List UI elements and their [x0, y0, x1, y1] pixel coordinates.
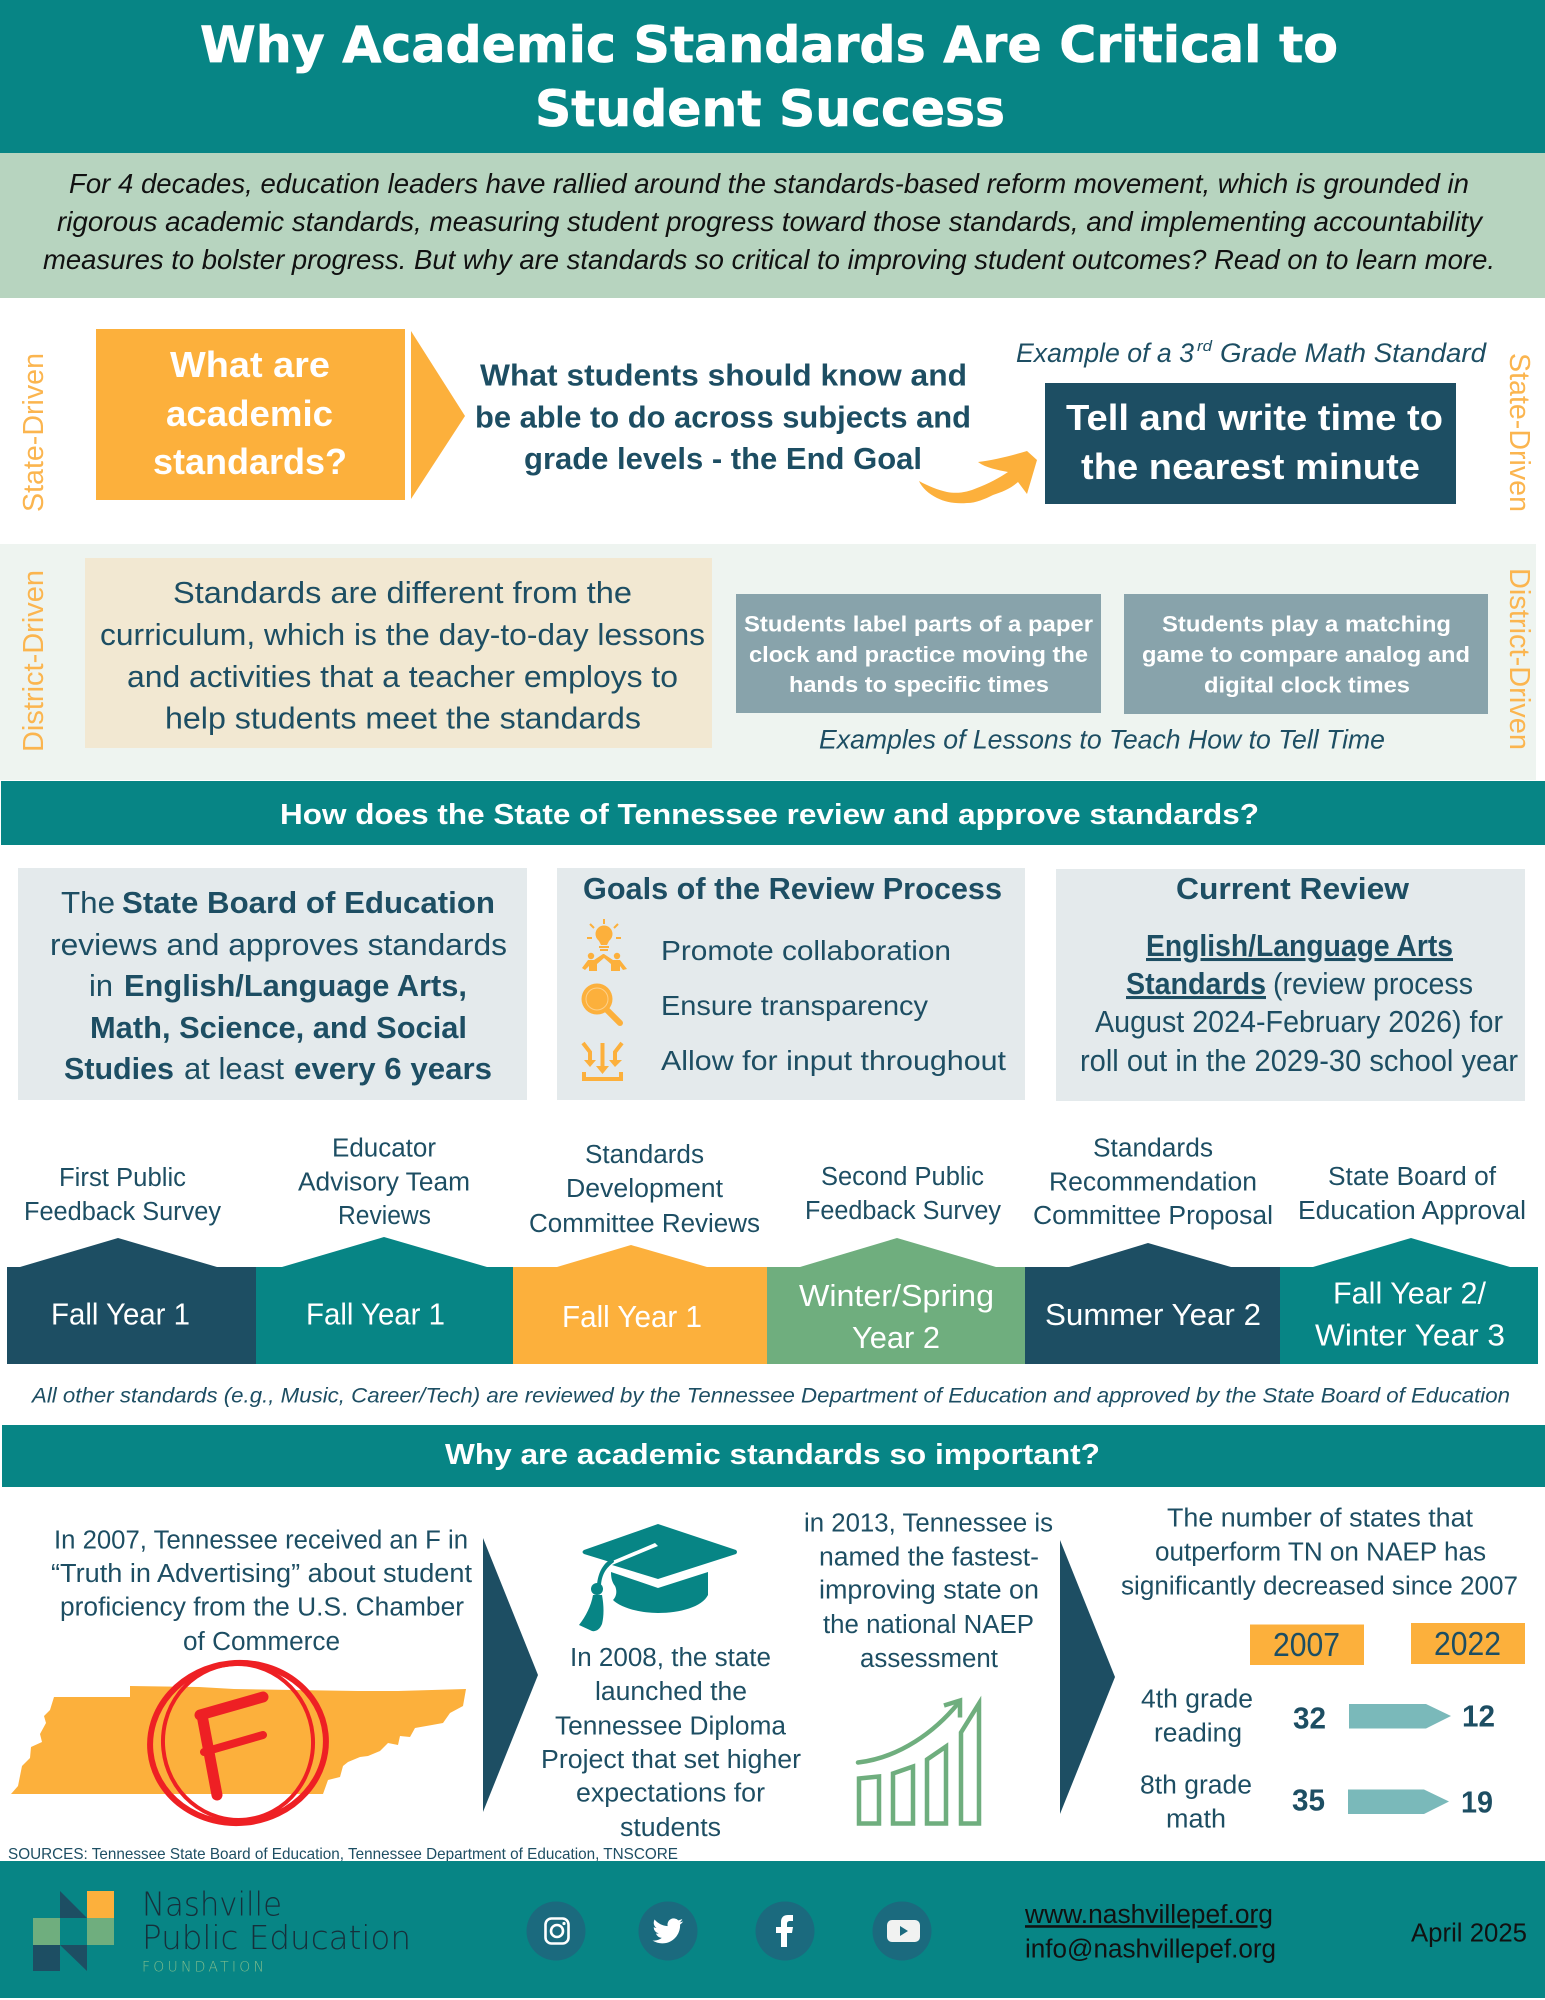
callout: curriculum difference: curriculum, which is the day-to-day lessons — [100, 617, 705, 652]
text block: definition of standards: grade levels - the End Goal — [524, 441, 922, 476]
step 6 label — [1298, 1163, 1526, 1225]
callout: example standard — [1045, 383, 1456, 504]
contact info: info@nashvillepef.org — [1025, 1935, 1276, 1963]
heading: example of a math standard: rd — [1197, 338, 1213, 355]
text block: 2007 F grade: In 2007, Tennessee received an F in — [54, 1526, 468, 1554]
caption: lesson examples: Examples of Lessons to Teach How to Tell Time — [819, 724, 1385, 754]
panel: state board: at least — [184, 1051, 284, 1086]
callout: example standard: the nearest minute — [1081, 446, 1420, 487]
step 2 block: Fall Year 1 — [306, 1296, 445, 1332]
lesson example 2 — [1124, 594, 1488, 714]
timeline — [7, 1134, 1538, 1364]
text block: 2013 NAEP: named the fastest- — [819, 1543, 1039, 1571]
logo wordmark: Nashville — [142, 1885, 282, 1924]
text block: 2008 diploma project: expectations for — [576, 1780, 766, 1808]
icon: graduation cap — [579, 1524, 737, 1631]
step 4 label — [805, 1163, 1001, 1225]
arrow: orange chevron — [411, 331, 465, 499]
callout: curriculum difference: and activities that a teacher employs to — [127, 659, 678, 694]
icon: collaboration bulb — [582, 919, 627, 971]
step 3 label: Committee Reviews — [529, 1210, 760, 1238]
step 2 label: Educator — [332, 1134, 437, 1162]
step 5 label — [1033, 1134, 1273, 1230]
step 6 block: Winter Year 3 — [1315, 1318, 1505, 1352]
text block: 2008 diploma project: Project that set higher — [541, 1746, 802, 1774]
text block: 2013 NAEP: in 2013, Tennessee is — [804, 1509, 1053, 1537]
callout: curriculum difference: help students meet the standards — [165, 700, 641, 736]
section heading: Tennessee review: How does the State of Tennessee review and approve standards? — [280, 799, 1259, 831]
text block: 2008 diploma project: Tennessee Diploma — [555, 1712, 787, 1740]
contact info — [1024, 1901, 1276, 1963]
lesson example 1: Students label parts of a paper — [744, 612, 1093, 636]
icon: instagram — [526, 1902, 586, 1960]
callout: what are academic standards — [96, 329, 405, 500]
intro band: rigorous academic standards, measuring student progress toward those standards, and implementing accountability — [57, 206, 1484, 237]
title banner — [0, 0, 1545, 153]
step 2 label: Reviews — [338, 1202, 431, 1230]
step 2 block — [256, 1237, 513, 1364]
arrow: navy 1 — [483, 1538, 538, 1812]
logo wordmark: Public Education — [142, 1918, 411, 1957]
heading: example of a math standard: Example of a 3 — [1016, 338, 1194, 368]
intro band: For 4 decades, education leaders have rallied around the standards-based reform movement, which is grounded in — [69, 168, 1469, 199]
text block: 2008 diploma project: In 2008, the state — [570, 1644, 771, 1672]
logo mark — [33, 1891, 114, 1971]
step 4 block: Winter/Spring — [799, 1278, 994, 1313]
section heading: importance: Why are academic standards so important? — [445, 1439, 1100, 1471]
row: 8th grade math: 35 — [1292, 1783, 1325, 1818]
heading: goals: Goals of the Review Process — [583, 871, 1002, 906]
icon: input arrows — [583, 1043, 622, 1079]
step 6 label: Education Approval — [1298, 1197, 1526, 1225]
lesson example 2: Students play a matching — [1162, 612, 1451, 636]
intro band: measures to bolster progress. But why are standards so critical to improving student outcomes? Read on to learn more. — [43, 244, 1495, 275]
callout: what are academic standards: standards? — [153, 441, 347, 482]
intro band — [0, 153, 1545, 298]
panel: current review: Current Review — [1176, 872, 1409, 906]
logo wordmark: FOUNDATION — [142, 1960, 264, 1976]
panel: state board: reviews and approves standards — [50, 927, 507, 962]
note: other standards: All other standards (e.g., Music, Career/Tech) are reviewed by the Tennessee Department of Education and approved by the State Board of Education — [30, 1384, 1510, 1408]
row: 4th grade reading: 32 — [1293, 1700, 1326, 1735]
step 2 label: Advisory Team — [298, 1168, 470, 1196]
panel: current review: English/Language Arts — [1146, 929, 1453, 963]
section heading: importance — [2, 1425, 1545, 1487]
panel: current review: Standards — [1126, 967, 1266, 1001]
heading: example of a math standard: Grade Math Standard — [1220, 338, 1487, 368]
row: 4th grade reading: 4th grade — [1141, 1686, 1253, 1714]
panel: district-driven — [0, 544, 1536, 780]
panel: goals of the review process — [557, 868, 1025, 1100]
step 5 block — [1025, 1243, 1280, 1364]
row: 8th grade math: 8th grade — [1140, 1772, 1252, 1800]
row: 8th grade math: 19 — [1461, 1785, 1493, 1820]
text block: 2013 NAEP: the national NAEP — [823, 1611, 1034, 1639]
step 3 block: Fall Year 1 — [562, 1299, 702, 1334]
year label 2022 — [1411, 1623, 1525, 1664]
text block: NAEP states: significantly decreased since 2007 — [1121, 1573, 1518, 1601]
lesson example 2: game to compare analog and — [1142, 642, 1470, 667]
text block: NAEP states: outperform TN on NAEP has — [1155, 1538, 1486, 1566]
step 3 block — [513, 1245, 767, 1364]
text: promote collaboration: Promote collaboration — [661, 935, 951, 966]
text block: definition of standards: What students should know and — [480, 358, 967, 392]
logo wordmark — [142, 1885, 411, 1976]
map: Tennessee with F grade — [11, 1654, 466, 1832]
step 5 block: Summer Year 2 — [1045, 1297, 1261, 1332]
footer — [0, 1861, 1545, 1998]
panel: state board: Studies — [64, 1051, 174, 1086]
text block: 2007 F grade: “Truth in Advertising” about student — [51, 1560, 472, 1588]
icon: youtube — [872, 1902, 932, 1960]
row: 4th grade reading — [1141, 1686, 1495, 1747]
year label 2007: 2007 — [1273, 1626, 1340, 1663]
text block: 2008 diploma project — [541, 1644, 802, 1842]
step 1 block: Fall Year 1 — [51, 1296, 190, 1332]
callout: what are academic standards: What are — [170, 344, 330, 385]
text block: definition of standards: be able to do across subjects and — [475, 400, 971, 434]
side label: district-driven right: District-Driven — [1503, 568, 1535, 750]
panel: state board: every 6 years — [294, 1051, 492, 1086]
lesson example 1 — [736, 594, 1101, 713]
text: allow for input: Allow for input throughout — [661, 1045, 1006, 1076]
callout: curriculum difference — [85, 558, 712, 748]
year label 2007 — [1250, 1624, 1364, 1665]
step 4 label: Feedback Survey — [805, 1197, 1001, 1225]
icon: magnifier — [582, 984, 620, 1023]
lesson example 1: hands to specific times — [789, 672, 1049, 697]
panel: state board: The — [61, 885, 115, 920]
panel: current review: roll out in the 2029-30 school year — [1080, 1044, 1518, 1078]
text block: NAEP states: The number of states that — [1167, 1504, 1473, 1532]
step 3 label: Development — [566, 1175, 723, 1203]
text block: 2007 F grade: of Commerce — [183, 1628, 340, 1656]
arrow: navy 2 — [1060, 1540, 1115, 1814]
text block: 2008 diploma project: students — [620, 1814, 721, 1842]
section heading: Tennessee review — [1, 781, 1545, 845]
contact info: www.nashvillepef.org — [1024, 1901, 1273, 1929]
arrow: curved orange — [919, 451, 1037, 503]
text block: 2008 diploma project: launched the — [595, 1678, 747, 1706]
row: 8th grade math — [1140, 1772, 1493, 1834]
step 3 label: Standards — [585, 1141, 704, 1169]
panel: current review — [1056, 869, 1525, 1101]
lesson example 1: clock and practice moving the — [749, 642, 1088, 667]
step 2 label — [298, 1134, 470, 1230]
panel: current review: August 2024-February 2026) for — [1095, 1005, 1503, 1039]
step 5 label: Committee Proposal — [1033, 1202, 1273, 1230]
panel: state board: English/Language Arts, — [124, 968, 467, 1003]
panel: state board: State Board of Education — [122, 885, 495, 920]
side label: state-driven right: State-Driven — [1503, 353, 1535, 512]
icon: growth chart — [858, 1700, 979, 1824]
panel: current review: (review process — [1273, 967, 1473, 1001]
title banner: Why Academic Standards Are Critical to — [200, 16, 1338, 74]
step 6 block: Fall Year 2/ — [1333, 1276, 1486, 1310]
step 3 label — [529, 1141, 760, 1238]
text block: 2007 F grade: proficiency from the U.S. Chamber — [60, 1594, 465, 1622]
panel: state board: in — [89, 968, 113, 1003]
text: ensure transparency: Ensure transparency — [661, 990, 928, 1021]
title banner: Student Success — [535, 80, 1005, 138]
step 5 label: Recommendation — [1049, 1168, 1257, 1196]
callout: what are academic standards: academic — [166, 393, 333, 434]
step 6 label: State Board of — [1328, 1163, 1497, 1191]
step 4 label: Second Public — [821, 1163, 984, 1191]
row: 8th grade math: math — [1166, 1806, 1226, 1834]
step 6 block — [1280, 1238, 1538, 1364]
icon: facebook — [756, 1902, 814, 1960]
row: 4th grade reading: reading — [1154, 1719, 1242, 1747]
side label: state-driven left: State-Driven — [18, 353, 50, 512]
panel: state board — [18, 868, 527, 1100]
text block: NAEP states — [1121, 1504, 1518, 1601]
step 4 block: Year 2 — [852, 1320, 940, 1355]
lesson example 2: digital clock times — [1204, 672, 1410, 698]
text block: 2013 NAEP: improving state on — [819, 1577, 1039, 1605]
text block: definition of standards — [475, 358, 971, 476]
text block: 2013 NAEP — [804, 1509, 1053, 1673]
sources: SOURCES: Tennessee State Board of Education, Tennessee Department of Education, TNSCORE — [8, 1846, 678, 1863]
text block: 2007 F grade — [51, 1526, 472, 1656]
step 1 label: Feedback Survey — [24, 1198, 221, 1226]
icon: twitter — [638, 1902, 698, 1960]
side label: district-driven left: District-Driven — [18, 570, 50, 752]
callout: curriculum difference: Standards are different from the — [173, 575, 632, 610]
step 4 block — [767, 1238, 1025, 1364]
step 1 label: First Public — [59, 1164, 186, 1192]
step 1 label — [24, 1164, 221, 1226]
date: April 2025 — [1411, 1919, 1527, 1947]
text block: 2013 NAEP: assessment — [860, 1645, 998, 1673]
step 1 block — [7, 1238, 256, 1364]
panel: state board: Math, Science, and Social — [90, 1010, 467, 1045]
row: 4th grade reading: 12 — [1462, 1699, 1495, 1734]
year label 2022: 2022 — [1434, 1625, 1501, 1662]
step 5 label: Standards — [1093, 1134, 1213, 1162]
heading: example of a math standard — [1016, 338, 1487, 368]
callout: example standard: Tell and write time to — [1066, 397, 1443, 438]
